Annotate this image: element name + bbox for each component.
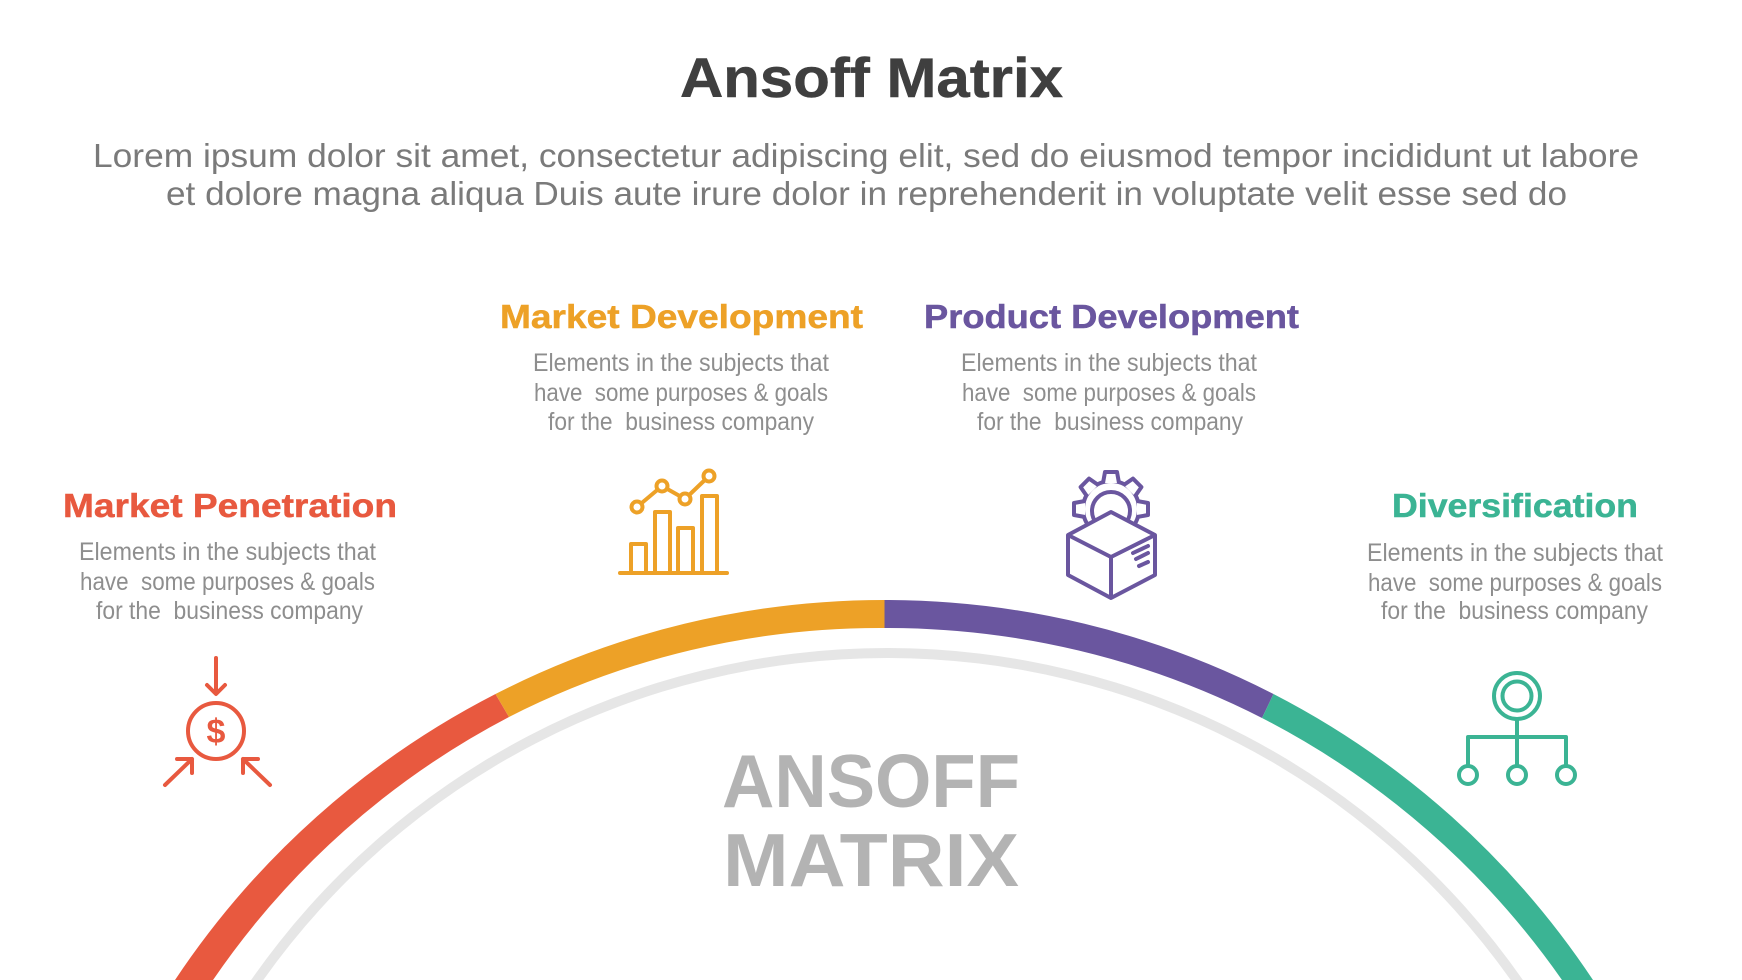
description: have some purposes & goals [1368, 569, 1662, 597]
icon: gear and box [1068, 472, 1155, 598]
panel: market development [500, 298, 863, 573]
arc segment: market penetration [175, 694, 509, 980]
subtitle text: Lorem ipsum dolor sit amet, consectetur adipiscing elit, sed do eiusmod tempor incididunt ut labore [93, 137, 1639, 174]
description: Elements in the subjects that [79, 538, 376, 566]
arc segment: market development [496, 600, 884, 717]
description: have some purposes & goals [962, 379, 1256, 407]
description [533, 349, 829, 436]
description: for the business company [1381, 597, 1648, 625]
description: for the business company [977, 408, 1243, 436]
center label: MATRIX [723, 818, 1019, 902]
center label [722, 739, 1020, 902]
description [1367, 539, 1663, 625]
segmented arc [175, 600, 1593, 980]
description: Elements in the subjects that [961, 349, 1257, 377]
description [961, 349, 1257, 436]
heading: Product Development [924, 298, 1299, 335]
heading: Market Penetration [63, 487, 397, 524]
title: Ansoff Matrix [680, 46, 1063, 109]
icon: bar chart with trend line [620, 470, 727, 573]
heading: Diversification [1392, 487, 1638, 524]
description: for the business company [96, 597, 363, 625]
subtitle text: et dolore magna aliqua Duis aute irure dolor in reprehenderit in voluptate velit esse sed do [166, 175, 1567, 212]
inner grey arc [251, 648, 1523, 980]
icon: dollar with arrows [165, 658, 270, 785]
description [79, 538, 376, 625]
panel: market penetration [63, 487, 397, 785]
panel: diversification [1367, 487, 1663, 784]
arc segment: diversification [1262, 694, 1593, 980]
center label: ANSOFF [722, 739, 1020, 823]
icon: dollar with arrows: $ [207, 713, 226, 751]
description: Elements in the subjects that [1367, 539, 1663, 567]
subtitle text [93, 137, 1639, 212]
panel: product development [924, 298, 1299, 598]
arc segment: product development [884, 600, 1274, 718]
heading: Market Development [500, 298, 863, 335]
description: for the business company [548, 408, 814, 436]
description: have some purposes & goals [80, 568, 375, 596]
description: have some purposes & goals [534, 379, 828, 407]
description: Elements in the subjects that [533, 349, 829, 377]
icon: hierarchy [1459, 673, 1575, 784]
